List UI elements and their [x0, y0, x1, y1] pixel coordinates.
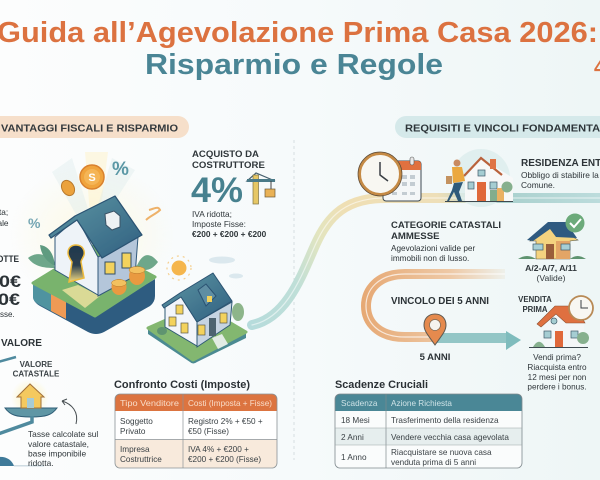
- table: scadenze cruciali: venduta prima di 5 anni: [391, 458, 476, 467]
- table: scadenze cruciali: Azione Richiesta: [391, 399, 452, 408]
- rays: [85, 152, 108, 215]
- text block: categorie catastali: [391, 220, 501, 263]
- table: scadenze cruciali: 2 Anni: [341, 433, 364, 442]
- title: Guida all’Agevolazione Prima Casa 2026:: [0, 17, 598, 49]
- heading: confronto costi: Confronto Costi (Imposte): [114, 379, 250, 391]
- table: confronto costi: Registro 2% + €50 +: [188, 417, 263, 426]
- text block: acquisto da costruttore: Imposte Fisse:: [192, 219, 246, 229]
- icon: house with clock, vendita prima: VENDITA: [518, 295, 552, 304]
- text block: residenza entro: Comune.: [521, 180, 555, 190]
- heading: scadenze cruciali: Scadenze Cruciali: [335, 379, 428, 391]
- table: confronto costi: €50 (Fisse): [188, 427, 229, 436]
- keyhole: [68, 245, 84, 282]
- table: confronto costi: IVA 4% + €200 +: [188, 445, 249, 454]
- title: Risparmio e Regole: [145, 49, 443, 81]
- icon: crane: [247, 173, 275, 204]
- text block: categorie catastali: CATEGORIE CATASTALI: [391, 220, 501, 231]
- text block: acquisto da costruttore: €200 + €200 + €200: [192, 229, 267, 239]
- text block: tasse calcolate: base imponibile: [28, 448, 87, 458]
- illustration: scale with valore catastale: VALORE: [20, 360, 53, 369]
- table: confronto costi: Privato: [120, 427, 146, 436]
- heading: vincolo dei 5 anni: VINCOLO DEI 5 ANNI: [391, 296, 489, 307]
- text block: cut off left savings: [0, 207, 42, 349]
- icon: valid house with check: [518, 214, 586, 259]
- table: confronto costi: Costi (Imposta + Fisse): [188, 399, 272, 408]
- leaves: [28, 254, 55, 268]
- label: valid categories: A/2-A/7, A/11: [525, 263, 577, 273]
- section header: vantaggi fiscali: [0, 116, 189, 138]
- section header: vantaggi fiscali: VANTAGGI FISCALI E RISPARMIO: [1, 122, 178, 134]
- table: confronto costi: Tipo Venditore: [120, 399, 179, 408]
- icon: clock and calendar: [358, 152, 421, 201]
- table: confronto costi: Soggetto: [120, 417, 153, 426]
- road: tan and teal path: [252, 198, 600, 325]
- section header: requisiti e vincoli: REQUISITI E VINCOLI FONDAMENTALI: [405, 122, 600, 134]
- coins: [112, 279, 126, 295]
- table: confronto costi: Costruttrice: [120, 455, 162, 464]
- illustration: small house: [148, 273, 246, 364]
- icon: person moving to house: [445, 149, 513, 207]
- text block: tasse calcolate: [28, 429, 98, 468]
- title: [0, 17, 600, 81]
- table: scadenze cruciali: 1 Anno: [341, 453, 367, 462]
- roof: [49, 196, 142, 258]
- table: scadenze cruciali: Vendere vecchia casa agevolata: [391, 433, 509, 442]
- label: valid categories: (Valide): [537, 273, 566, 283]
- table: scadenze cruciali: Scadenza: [341, 399, 378, 408]
- sparkle: [146, 208, 160, 220]
- illustration: scale with valore catastale: [0, 357, 60, 466]
- walls: [55, 218, 98, 295]
- table: scadenze cruciali: Riacquistare se nuova casa: [391, 448, 492, 457]
- text block: acquisto da costruttore: [191, 149, 267, 239]
- text block: acquisto da costruttore: COSTRUTTORE: [192, 160, 265, 171]
- text block: residenza entro: [521, 158, 600, 190]
- platform: [33, 279, 155, 334]
- text block: vendi prima: [527, 353, 587, 392]
- table: confronto costi: Impresa: [120, 445, 150, 454]
- icon: coins and percent above house: [28, 159, 129, 231]
- table: scadenze cruciali: 18 Mesi: [341, 416, 370, 425]
- text block: vendi prima: 12 mesi per non: [528, 373, 587, 382]
- table: confronto costi: €200 + €200 (Fisse): [188, 455, 261, 464]
- text block: vendi prima: perdere i bonus.: [527, 382, 587, 392]
- icon: sun and clouds: [167, 256, 243, 280]
- text block: vendi prima: Vendi prima?: [533, 353, 581, 362]
- icon: house with clock, vendita prima: PRIMA: [522, 305, 548, 314]
- chimney: [105, 211, 120, 230]
- text block: categorie catastali: immobili non di lusso.: [391, 254, 469, 263]
- text block: tasse calcolate: Tasse calcolate sul: [28, 429, 98, 439]
- text block: acquisto da costruttore: IVA ridotta;: [192, 209, 232, 219]
- text block: acquisto da costruttore: 4%: [191, 171, 243, 210]
- text block: vendi prima: Riacquista entro: [527, 363, 587, 372]
- windows: [105, 262, 115, 274]
- table: scadenze cruciali: Trasferimento della residenza: [391, 416, 499, 425]
- text block: categorie catastali: AMMESSE: [391, 231, 440, 242]
- arrow: to valore catastale: [62, 399, 77, 424]
- illustration: scale with valore catastale: CATASTALE: [13, 370, 60, 378]
- icon: coins and percent above house: S: [88, 172, 96, 184]
- table: scadenze cruciali: [335, 394, 522, 468]
- text block: tasse calcolate: ridotta.: [28, 458, 54, 468]
- road: orange curve and arrow to 5 anni: [366, 274, 521, 350]
- table: confronto costi: [115, 394, 277, 468]
- icon: map pin: [424, 314, 446, 345]
- icon: coins and percent above house: %: [112, 159, 129, 180]
- text block: tasse calcolate: valore catastale,: [28, 439, 89, 449]
- text block: cut off left savings: VALORE: [1, 338, 42, 349]
- illustration: main house with keyhole: [10, 152, 174, 334]
- column divider: [293, 140, 295, 460]
- icon: house with clock, vendita prima: [518, 295, 593, 348]
- text block: acquisto da costruttore: ACQUISTO DA: [192, 149, 259, 160]
- label: 5 anni: 5 ANNI: [420, 352, 450, 363]
- icon: coins and percent above house: %: [28, 215, 41, 231]
- text block: categorie catastali: Agevolazioni valide per: [391, 244, 475, 253]
- section header: requisiti e vincoli: [395, 116, 600, 138]
- label: valid categories: [525, 263, 577, 283]
